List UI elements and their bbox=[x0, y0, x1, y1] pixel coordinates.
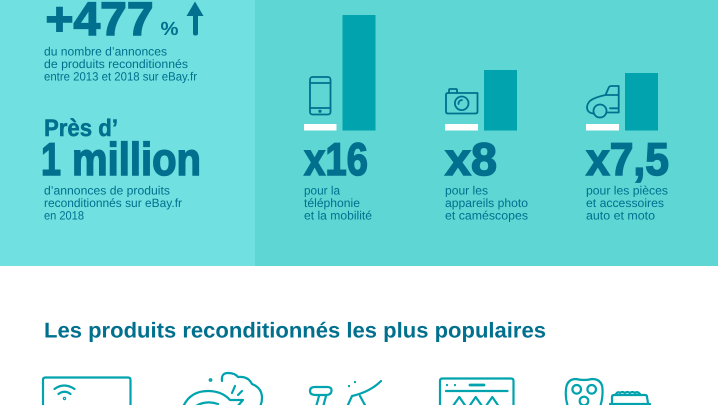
text: phones caption: et la mobilité bbox=[304, 208, 372, 222]
stat: 1 million: million bbox=[72, 133, 201, 185]
stat: x7,5: x7,5 bbox=[586, 133, 669, 185]
heading: popular products title: Les produits reconditionnés les plus populaires bbox=[44, 318, 546, 342]
text: listings count description: en 2018 bbox=[44, 208, 84, 222]
bar: baseline white bbox=[304, 124, 336, 130]
text: listings growth description: du nombre d’annonces bbox=[44, 44, 167, 58]
text: listings count description bbox=[44, 184, 182, 222]
panel: left statistics background bbox=[0, 0, 255, 266]
panel: popular products bbox=[43, 318, 650, 405]
bar: baseline white bbox=[586, 124, 619, 130]
icon: electric shaver head bbox=[566, 379, 603, 405]
text: auto parts caption: auto et moto bbox=[586, 208, 655, 222]
icon: camera bbox=[446, 89, 478, 114]
text: auto parts caption bbox=[586, 184, 668, 222]
column: auto parts bbox=[586, 73, 669, 222]
text: listings growth description: de produits reconditionnés bbox=[44, 57, 188, 71]
column: phones and mobility bbox=[304, 15, 376, 222]
bar: multiplied teal bbox=[484, 70, 517, 130]
text: phones caption bbox=[304, 184, 372, 222]
text: cameras caption bbox=[445, 184, 528, 222]
text: listings count description: d’annonces de produits bbox=[44, 184, 170, 198]
icon: exercise bike bbox=[310, 381, 381, 405]
heading: Près d': Près d’ bbox=[44, 115, 118, 142]
bar: baseline white bbox=[445, 124, 478, 130]
icon: tablet with wifi bbox=[43, 378, 130, 405]
text: listings count description: reconditionnés sur eBay.fr bbox=[44, 196, 182, 210]
icon: pet food bowl bbox=[610, 392, 650, 404]
text: cameras caption: pour les bbox=[445, 184, 488, 198]
panel: right growth background bbox=[255, 0, 718, 266]
bar: multiplied teal bbox=[625, 73, 658, 130]
column: cameras bbox=[445, 70, 528, 222]
icon: food dish and cloud bbox=[183, 373, 262, 405]
text: auto parts caption: pour les pièces bbox=[586, 184, 668, 198]
text: listings growth description: entre 2013 et 2018 sur eBay.fr bbox=[44, 69, 197, 83]
icon: web page window bbox=[440, 378, 514, 405]
icon: car bbox=[587, 86, 619, 118]
stat: x8: x8 bbox=[445, 133, 497, 185]
bar: multiplied teal bbox=[342, 15, 376, 130]
stat: 1 million: 1 bbox=[41, 133, 61, 185]
text: listings growth description bbox=[44, 44, 197, 83]
stat: x16: x16 bbox=[304, 133, 368, 185]
text: phones caption: téléphonie bbox=[304, 196, 360, 210]
icon: up arrow bbox=[186, 2, 204, 36]
icon: smartphone bbox=[310, 77, 330, 114]
text: auto parts caption: et accessoires bbox=[586, 196, 664, 210]
text: cameras caption: appareils photo bbox=[445, 196, 528, 210]
text: cameras caption: et caméscopes bbox=[445, 208, 528, 222]
stat: +477 percent: % bbox=[160, 19, 179, 40]
text: phones caption: pour la bbox=[304, 184, 340, 198]
